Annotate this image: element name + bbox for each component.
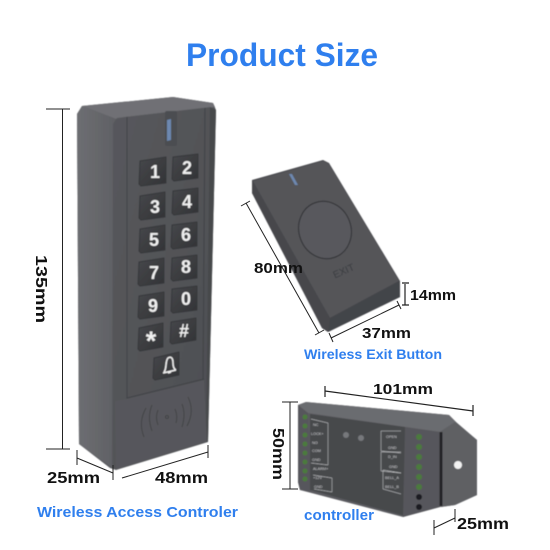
LED indicator — [165, 111, 177, 146]
exit button device — [252, 160, 400, 332]
left terminal screws — [302, 414, 308, 482]
key 7: 7 — [149, 263, 159, 283]
key 3: 3 — [150, 197, 160, 217]
key hash — [170, 318, 196, 344]
controller front panel — [310, 414, 405, 516]
dimension: 14mm: 14mm — [410, 287, 456, 304]
key 0: 0 — [181, 289, 191, 309]
key 3 — [139, 192, 165, 220]
exit button round push — [291, 194, 359, 266]
left terminal labels: NO — [312, 441, 318, 445]
right terminal labels: BELL_B — [385, 485, 399, 489]
key hash: # — [179, 321, 189, 341]
key 4 — [172, 188, 198, 215]
left terminal labels: GND — [312, 458, 321, 462]
dimension: 48mm: 48mm — [155, 470, 208, 487]
left terminal labels: NC — [313, 423, 319, 427]
dimension: 80mm: 80mm — [254, 260, 303, 277]
dimension: 25mm: 25mm — [47, 470, 100, 487]
right terminal labels: GND — [389, 465, 398, 469]
RFID wave symbol — [141, 397, 191, 437]
key 9: 9 — [148, 296, 158, 316]
label: wireless exit button: Wireless Exit Button — [304, 347, 442, 362]
key star: * — [146, 326, 157, 356]
key 5: 5 — [149, 230, 159, 250]
controller left terminal strip — [298, 405, 311, 491]
dimension: 14mm — [402, 283, 456, 305]
keypad device inner channel line — [127, 108, 205, 398]
RFID panel — [115, 380, 207, 469]
key 2 — [172, 154, 198, 181]
right terminal screws — [416, 434, 422, 510]
dimension: 37mm — [329, 301, 411, 342]
indicator lights — [343, 432, 364, 441]
right terminal labels: BELL_A — [385, 476, 399, 480]
key 9 — [138, 292, 164, 319]
key bell — [153, 352, 179, 380]
keypad device right bevel — [206, 107, 216, 442]
controller right mounting ear — [440, 422, 477, 507]
key 8: 8 — [181, 257, 191, 277]
terminal box outlines — [311, 419, 401, 494]
left terminal labels — [311, 423, 329, 489]
title: Product Size — [186, 37, 378, 73]
dimension: 101mm: 101mm — [373, 381, 433, 398]
exit button front side — [328, 281, 400, 332]
left terminal labels: ALARM+ — [313, 467, 329, 471]
key 1: 1 — [150, 162, 160, 182]
label: controller: controller — [304, 508, 374, 524]
dimension: 37mm: 37mm — [362, 325, 411, 342]
key 6: 6 — [181, 225, 191, 245]
exit button top face — [253, 161, 399, 318]
dimension: 25mm (controller) — [434, 509, 509, 535]
exit button LED — [289, 174, 298, 185]
key 0 — [171, 286, 197, 313]
controller right terminal block — [403, 427, 440, 517]
dimension: 50mm: 50mm — [269, 428, 286, 480]
dimension: 80mm — [241, 201, 324, 335]
dimension: 25mm — [47, 450, 113, 487]
dimension: 50mm — [269, 402, 298, 489]
dimension: 25mm (controller): 25mm — [457, 516, 509, 533]
keypad device front face — [113, 107, 211, 469]
dimension: 48mm — [122, 445, 208, 487]
left terminal labels: COM — [312, 449, 321, 453]
right terminal labels: D_IN — [388, 455, 397, 459]
exit button left side — [252, 181, 330, 332]
right terminal labels: OPEN — [386, 435, 397, 439]
right terminal labels: GND — [388, 446, 397, 450]
key 8 — [171, 255, 197, 281]
key 1 — [139, 157, 166, 186]
key star — [138, 323, 163, 356]
key 7 — [138, 258, 164, 286]
dimension: 135mm — [32, 109, 70, 449]
label: wireless access controller: Wireless Access Controler — [37, 504, 238, 521]
controller top edge — [298, 402, 456, 432]
key 5 — [139, 225, 165, 253]
EXIT label: EXIT — [332, 262, 356, 281]
keypad device: wireless access controller — [77, 97, 216, 470]
left terminal labels: +12V — [313, 476, 322, 480]
dimension: 101mm — [325, 381, 473, 416]
controller device — [298, 402, 477, 517]
left terminal labels: LOCK+ — [311, 432, 324, 436]
dimension: 135mm: 135mm — [32, 255, 49, 323]
key 2: 2 — [182, 158, 192, 178]
key 4: 4 — [182, 192, 192, 212]
keypad device top edge — [82, 97, 215, 119]
keypad device left side — [77, 106, 116, 468]
left terminal labels: GND — [314, 485, 323, 489]
key 6 — [171, 222, 197, 249]
right terminal labels — [385, 435, 399, 489]
